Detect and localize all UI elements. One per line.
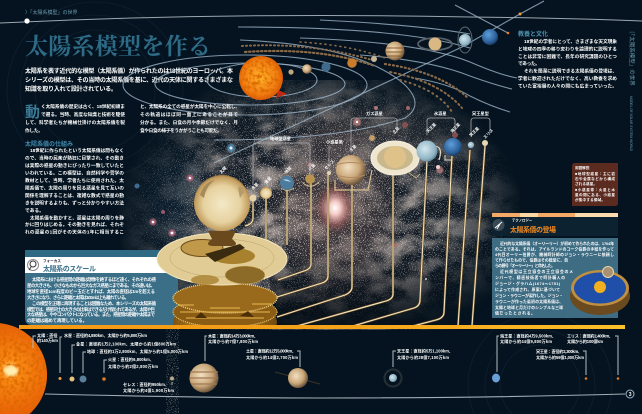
panel text: ジョージ・グラハム(1674〜1751) bbox=[495, 281, 561, 286]
label: Pluto bbox=[536, 348, 587, 380]
panel text: 近代模型は王立協会の王立協会のメ bbox=[500, 269, 573, 274]
header marker bbox=[24, 18, 30, 24]
planet: Pluto marker bbox=[507, 32, 509, 34]
text block: culture: と地球の四季の移り変わりを論理的に説明する bbox=[518, 46, 617, 52]
Earth ball bbox=[280, 176, 294, 190]
orange planet tags: セレス bbox=[322, 158, 335, 171]
label: Ceres: セレス：直径約950km、 bbox=[123, 381, 169, 387]
text block: culture: 学者に歓迎されただけでなく、高い教養を求め bbox=[518, 75, 617, 82]
planet: Neptune bbox=[482, 29, 498, 45]
text block: culture: 18世紀の学者にとって、さまざまな天文現象 bbox=[524, 38, 617, 45]
label: Saturn: 土星：直径約12万5,000km、 bbox=[246, 348, 296, 354]
bracket: terrestrial planets bbox=[253, 135, 310, 185]
panel text: て作らせたもので、伯爵はその模型に、自 bbox=[495, 258, 568, 262]
planet: Venus bbox=[302, 64, 312, 74]
body column one bbox=[25, 103, 125, 236]
body column one: である。 bbox=[25, 207, 44, 214]
subheading: mechanism: 太陽系儀の仕組み bbox=[25, 140, 73, 148]
icon: small orrery photo bbox=[570, 266, 630, 315]
label: Sun bbox=[33, 332, 58, 348]
asteroid belt band bbox=[166, 329, 179, 414]
planet: Ceres bbox=[371, 56, 377, 62]
vertical side title: 〔「太陽系模型」の世界 bbox=[628, 28, 636, 86]
panel heading: フォーカス bbox=[43, 258, 61, 263]
panel text: 近代的な太陽系儀（オーリーリー）が初めて作られたのは、1704年 bbox=[500, 241, 614, 246]
model planets along orbits bbox=[288, 12, 522, 75]
panel: focus scale: 太陽系のスケール bbox=[43, 264, 96, 273]
label: Eris: 太陽から約100億km bbox=[567, 338, 603, 344]
body column one: かに回りはじめる。その動きを見れば、それぞ bbox=[25, 221, 124, 228]
Ceres ball bbox=[327, 171, 331, 175]
orbit lines and tilted orbits bbox=[123, 1, 544, 163]
panel text: 地球を直径1cm程度のビー玉だとすれば、太陽の直径は1mを超える bbox=[27, 288, 155, 295]
label: Uranus bbox=[393, 348, 453, 367]
icon: telescope badge bbox=[492, 219, 504, 231]
header rule bbox=[0, 15, 642, 23]
label: Ceres bbox=[123, 376, 174, 393]
note box: glossary: ■小惑星帯：火星と木 bbox=[575, 187, 615, 192]
text block: culture bbox=[518, 30, 617, 90]
label: Earth bbox=[80, 348, 188, 382]
label: Eris bbox=[567, 332, 619, 380]
page number: 3 bbox=[629, 392, 632, 398]
drop cap: 動 bbox=[25, 104, 40, 121]
planet: Mars bbox=[347, 58, 357, 68]
label: Neptune bbox=[497, 332, 556, 372]
panel text: 模型では、惑星同士の大きさの比率はできるだけ保たれてあるが、太陽や巨 bbox=[27, 306, 156, 313]
body column two: 食や日食の様子をうかがうことも可能だ。 bbox=[140, 127, 222, 134]
planet: Earth bbox=[321, 62, 331, 72]
bracket: asteroid belt bbox=[326, 138, 343, 165]
body column one: 18世紀に作られたという太陽系儀は間もなく bbox=[30, 147, 124, 154]
body column one: 教材として、当時、学者たちに使用された。太 bbox=[25, 177, 124, 184]
text block: culture: ことは非常に困難で、長年の研究課題のひとつ bbox=[518, 53, 617, 60]
orrery gear base bbox=[157, 175, 287, 342]
intro text bbox=[25, 67, 233, 93]
icon: magnifier bbox=[28, 260, 38, 270]
orange planet tags: 冥王星 bbox=[467, 125, 480, 138]
bracket: gas giants bbox=[351, 110, 397, 150]
orange planet tags: 金星 bbox=[262, 175, 272, 185]
bracket: gas giants: ガス惑星 bbox=[366, 110, 383, 117]
bright stars and nebulae bbox=[134, 106, 458, 280]
planet: Jupiter bbox=[190, 364, 218, 392]
label: Neptune: 太陽から約44億9,800万km bbox=[500, 338, 552, 344]
scale row labels and planets bbox=[33, 332, 619, 393]
Saturn ball with ring bbox=[371, 141, 420, 178]
label: Mars bbox=[102, 356, 158, 381]
body column one: きを説明するよりも、ずっと分かりやすい方法 bbox=[25, 200, 124, 206]
label: Ceres: 太陽から約4億1,900万km bbox=[123, 387, 174, 393]
large sun, bottom left bbox=[0, 323, 48, 414]
orange planet tags: 木星 bbox=[347, 143, 357, 153]
body column one: く太陽系儀の歴史は古く、18世紀初頭ま bbox=[41, 103, 125, 110]
bracket: asteroid belt: 小惑星帯 bbox=[326, 138, 343, 146]
bracket: dwarf planets: 冥王星型 bbox=[472, 110, 489, 117]
panel text: のことである。それは、アイルランドのコーク伯爵の手紙を作って bbox=[495, 246, 614, 252]
label: Sun: 約140万km bbox=[37, 337, 58, 343]
orange planet tags: 太陽 bbox=[217, 165, 227, 175]
label: Eris: エリス：直径約2,400km、 bbox=[567, 332, 613, 338]
body column one: して、科学者たちが機械仕掛けの太陽系儀を製 bbox=[25, 119, 125, 126]
label: Saturn: 太陽から約14億2,700万km bbox=[246, 354, 298, 360]
panel heading: テクノロジー bbox=[512, 218, 533, 222]
orange divider bar bbox=[19, 325, 625, 329]
label: Saturn bbox=[246, 348, 300, 367]
planet: Saturn bbox=[418, 38, 452, 50]
body column one: いわれている。この模型は、自然科学や哲学の bbox=[25, 170, 124, 176]
intro text: 太陽系を表す近代的な模型（太陽系儀）が作られたのは18世紀のヨーロッパ。本 bbox=[25, 67, 233, 75]
orrery rods bbox=[245, 146, 485, 326]
label: Pluto: 冥王星：直径約2,300km、 bbox=[536, 348, 582, 354]
note box: glossary: 用語解説 bbox=[575, 165, 590, 170]
Venus ball bbox=[260, 187, 272, 199]
orange planet tags: 水星 bbox=[249, 181, 259, 191]
sun illustration bbox=[239, 56, 287, 100]
panel text: ンバーで、精密技術者で時計職人の bbox=[495, 275, 565, 280]
panel: focus scale bbox=[25, 250, 178, 325]
note box: glossary: ■地球型惑星：主に岩 bbox=[575, 171, 615, 176]
planet: Jupiter bbox=[386, 42, 404, 60]
label: Pluto: 太陽から約59億1,000万km bbox=[536, 354, 584, 360]
planet: Uranus bbox=[458, 27, 472, 53]
panel: technology: 太陽系儀の登場 bbox=[510, 225, 556, 234]
label: Jupiter bbox=[205, 332, 258, 361]
label: Venus: 金星：直径約1万2,100km、太陽から約1億800万km bbox=[76, 340, 176, 346]
planet: Eris marker bbox=[518, 12, 522, 16]
body column one: 関係を理解することは、複雑な数式で惑星の動 bbox=[25, 192, 124, 199]
note box: glossary bbox=[572, 163, 618, 206]
label: Venus bbox=[70, 340, 176, 382]
panel text: ラウニーが作った最初の太陽系儀は、 bbox=[495, 299, 563, 304]
text block: culture: それを簡潔に説明できる太陽系儀の登場は、 bbox=[524, 68, 617, 74]
panel text bbox=[495, 241, 614, 316]
planet: Neptune bbox=[492, 374, 500, 382]
panel text: 太陽系における惑星間の距離は想像を絶するほど遠く、それぞれの惑 bbox=[32, 276, 157, 283]
label: Earth: 地球：直径約1万2,800km、太陽から約1億5,000万km bbox=[87, 348, 188, 354]
body column two: その軌道はほぼ同一面上にあることが目で bbox=[140, 111, 238, 118]
sphere pedestal bbox=[208, 231, 236, 246]
bracket: ice giants bbox=[427, 110, 455, 135]
vertical side title: MODEL OF SOLAR SYSTEM WORLD bbox=[629, 96, 633, 152]
Jupiter ball with arm bbox=[335, 155, 372, 190]
panel text: 太陽と地球と月だけのシンプルな三球 bbox=[495, 305, 563, 310]
rod planets and arms bbox=[250, 138, 488, 202]
bracket: terrestrial planets: 地球型惑星 bbox=[270, 135, 291, 141]
vertical side title bbox=[628, 28, 636, 152]
intro text: 知識を取り入れて設計されている。 bbox=[25, 85, 117, 93]
planet: Mercury bbox=[288, 69, 294, 75]
bottom scale line bbox=[45, 394, 625, 398]
orange planet tags: 火星 bbox=[306, 162, 316, 172]
planet: Uranus bbox=[384, 370, 402, 386]
panel text: の距離は縮めて再現している。 bbox=[27, 317, 87, 324]
panel text: 大きさになり、さらに距離と太陽は100m以上も離れている。 bbox=[27, 294, 129, 301]
label: Mercury: 水星：直径約4,880km、太陽から約5,800万km bbox=[64, 332, 147, 338]
body column two: 分かる。また、日食の月や季節だけでなく、月 bbox=[140, 119, 238, 126]
panel text: 星の大きさも、小さなものから巨大なガス惑星にまである。その違いは、 bbox=[27, 282, 155, 289]
Pluto ball bbox=[468, 142, 474, 148]
body column one: れの惑星の1回がその天体の1年に相当するこ bbox=[25, 228, 124, 236]
bracket: ice giants: 氷惑星 bbox=[434, 110, 447, 116]
Mercury ball bbox=[250, 194, 256, 202]
body column one: ので、当時の民衆が熱狂に目撃され、その動き bbox=[25, 154, 124, 162]
note box: glossary: 星の間にある、小惑星 bbox=[575, 192, 615, 197]
body column two: と、太陽系の全ての惑星が太陽を中心に公転し、 bbox=[140, 103, 240, 110]
panel text: 4代目オーリー伯爵が、機械時計師のジョン・ラウニーに依頼し bbox=[495, 252, 614, 257]
section label: 〉「太陽系模型」の世界 bbox=[25, 9, 78, 16]
body column one: 太陽系儀を動かすと、惑星は太陽の周りを静 bbox=[30, 214, 124, 222]
label: Mars: 火星：直径約6,800km、 bbox=[108, 356, 154, 362]
label: Sun: 太陽：直径 bbox=[37, 332, 58, 338]
gears on disc bbox=[225, 266, 265, 284]
panel text: によって作成され、原案に基づいて bbox=[495, 287, 560, 292]
note box: glossary: が集中する領域。 bbox=[575, 197, 605, 202]
Neptune ball bbox=[444, 138, 462, 160]
body column one: で遡る。当時、高度な知識と技術を駆使 bbox=[41, 111, 125, 118]
asteroid belt bbox=[242, 42, 468, 112]
panel text: らの爵号「オーリーリー」と命名した。 bbox=[495, 263, 555, 268]
orange planet tags: 土星 bbox=[390, 125, 400, 135]
label: Neptune: 海王星：直径約4万9,500km、 bbox=[500, 332, 556, 338]
galaxy bright core bbox=[313, 180, 357, 236]
panel: technology bbox=[492, 213, 630, 318]
label: Jupiter: 木星：直径約14万3,000km、 bbox=[208, 332, 258, 338]
label: Mercury bbox=[58, 332, 147, 380]
note box: glossary: 石や金属などから構成 bbox=[575, 176, 615, 181]
brass sun sphere bbox=[194, 175, 250, 231]
label: Uranus: 天王星：直径約5万1,100km、 bbox=[397, 348, 453, 354]
label: Mars: 太陽から約2億2,800万km bbox=[108, 363, 158, 369]
title: 太陽系模型を作る bbox=[25, 34, 211, 59]
panel text: この模型を正確に再現することは困難なため、本シリーズの太陽系儀 bbox=[32, 300, 157, 307]
text block: culture: 教養と文化 bbox=[518, 30, 548, 38]
body column two bbox=[140, 103, 240, 134]
note box: glossary: される惑星。 bbox=[575, 181, 597, 186]
orange planet tags bbox=[217, 121, 494, 191]
planet: Saturn bbox=[275, 368, 320, 388]
orange planet tags: 地球 bbox=[282, 165, 292, 175]
label: Jupiter: 太陽から約7億7,800万km bbox=[208, 338, 258, 344]
body column one: 作した。 bbox=[25, 127, 43, 134]
bracket: dwarf planets bbox=[471, 110, 490, 133]
Mars ball bbox=[303, 174, 319, 186]
panel text: ジョン・ラウニーが製作した。ジョン・ bbox=[495, 293, 563, 298]
orange planet tags: 天王星 bbox=[424, 121, 437, 134]
intro text: シリーズの模型は、その当時の太陽系儀を基に、近代の天体に関するさまざまな bbox=[25, 76, 233, 84]
page number bbox=[626, 390, 634, 398]
orange planet tags: エリス bbox=[482, 128, 494, 140]
label: Uranus: 太陽から約28億7,100万km bbox=[397, 354, 449, 360]
text block: culture: であった。 bbox=[518, 60, 540, 67]
panel text bbox=[27, 276, 157, 324]
orange planet tags: 海王星 bbox=[448, 121, 461, 134]
category brackets and labels bbox=[253, 110, 490, 185]
panel text: 儀だったとされる。 bbox=[495, 310, 535, 316]
galaxy photograph background bbox=[100, 80, 520, 330]
top disc bbox=[157, 233, 287, 285]
text block: culture: ていた富裕層の人々の間にも広まっていった。 bbox=[518, 82, 617, 90]
Eris ball bbox=[482, 140, 488, 146]
body column one: は実際の惑星の動きにぴったり一致していたと bbox=[25, 162, 124, 169]
body column one: 陽系儀で、太陽の周りを回る惑星を見て互いの bbox=[25, 184, 124, 192]
panel text: 大な惑星は、ややコンパクトになっている。また、惑星間の距離や太陽まで bbox=[27, 311, 156, 318]
Uranus ball bbox=[416, 140, 440, 162]
